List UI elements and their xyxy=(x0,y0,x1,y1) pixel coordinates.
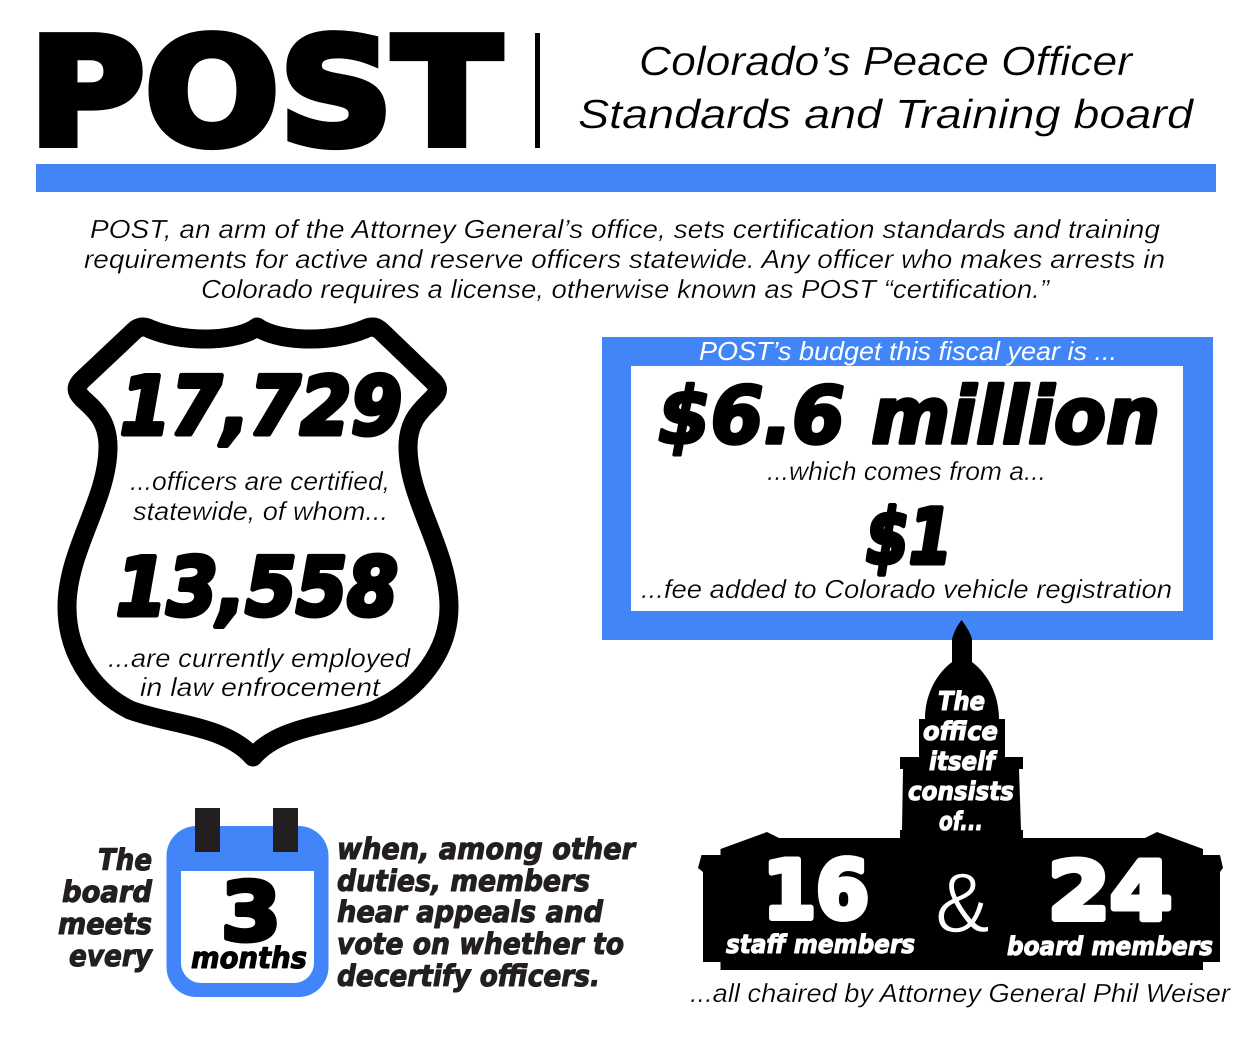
text: employed in law enforcement: in law enfrocement xyxy=(140,672,382,702)
panel: capitol office xyxy=(698,620,1223,970)
subtitle xyxy=(578,38,1194,137)
icon: capitol silhouette xyxy=(698,620,1223,970)
subtitle: Colorado’s Peace Officer xyxy=(639,38,1135,84)
number: employed officers: 13,558 xyxy=(116,541,398,634)
text: office consists of xyxy=(908,687,1014,837)
intro paragraph: requirements for active and reserve officers statewide. Any officer who makes arrests in xyxy=(84,244,1165,274)
text: office consists of: The xyxy=(938,687,985,717)
text: office consists of: office xyxy=(923,717,998,747)
fee amount: $1 xyxy=(866,492,952,581)
label: board members: board members xyxy=(1007,932,1213,962)
text: office consists of: itself xyxy=(929,747,998,777)
text: the board meets every xyxy=(58,843,153,973)
blue header bar xyxy=(36,164,1216,192)
text: employed in law enforcement: ...are currently employed xyxy=(108,643,412,673)
text: board duties: vote on whether to xyxy=(337,927,624,961)
text: certified statewide xyxy=(130,466,390,526)
budget heading: POST’s budget this fiscal year is ... xyxy=(699,336,1117,366)
text: which comes from: ...which comes from a... xyxy=(767,456,1046,486)
text: board duties: decertify officers. xyxy=(337,959,600,993)
ampersand: & xyxy=(935,856,990,951)
panel: budget xyxy=(602,336,1213,640)
text: board duties xyxy=(337,832,637,993)
text: office consists of: of... xyxy=(939,807,983,837)
intro paragraph xyxy=(84,214,1165,304)
subtitle: Standards and Training board xyxy=(578,91,1194,137)
text: board duties: when, among other xyxy=(337,832,637,866)
text: chaired by: ...all chaired by Attorney General Phil Weiser xyxy=(690,978,1231,1008)
icon: shield outline xyxy=(67,327,449,757)
text: the board meets every: meets xyxy=(58,907,152,941)
number: certified officers: 17,729 xyxy=(120,360,402,453)
label: months: months xyxy=(191,941,307,975)
number: 3: 3 xyxy=(221,866,281,959)
label: staff members: staff members xyxy=(726,930,915,960)
text: the board meets every: The xyxy=(98,843,152,877)
text: the board meets every: every xyxy=(69,939,153,973)
text: certified statewide: ...officers are certified, xyxy=(130,466,390,496)
text: employed in law enforcement xyxy=(108,643,412,702)
panel: officer badge xyxy=(67,327,449,757)
text: fee source: ...fee added to Colorado vehicle registration xyxy=(641,574,1172,604)
text: board duties: hear appeals and xyxy=(337,895,603,929)
number: board: 24 xyxy=(1048,845,1172,938)
text: office consists of: consists xyxy=(908,777,1014,807)
title: POST: POST xyxy=(29,7,501,179)
budget amount: $6.6 million xyxy=(658,372,1160,462)
text: board duties: duties, members xyxy=(337,864,590,898)
number: staff: 16 xyxy=(763,844,869,937)
text: the board meets every: board xyxy=(62,875,152,909)
intro paragraph: Colorado requires a license, otherwise known as POST “certification.” xyxy=(201,274,1050,304)
text: certified statewide: statewide, of whom... xyxy=(133,496,388,526)
icon: calendar xyxy=(166,808,328,997)
intro paragraph: POST, an arm of the Attorney General’s office, sets certification standards and training xyxy=(90,214,1161,244)
